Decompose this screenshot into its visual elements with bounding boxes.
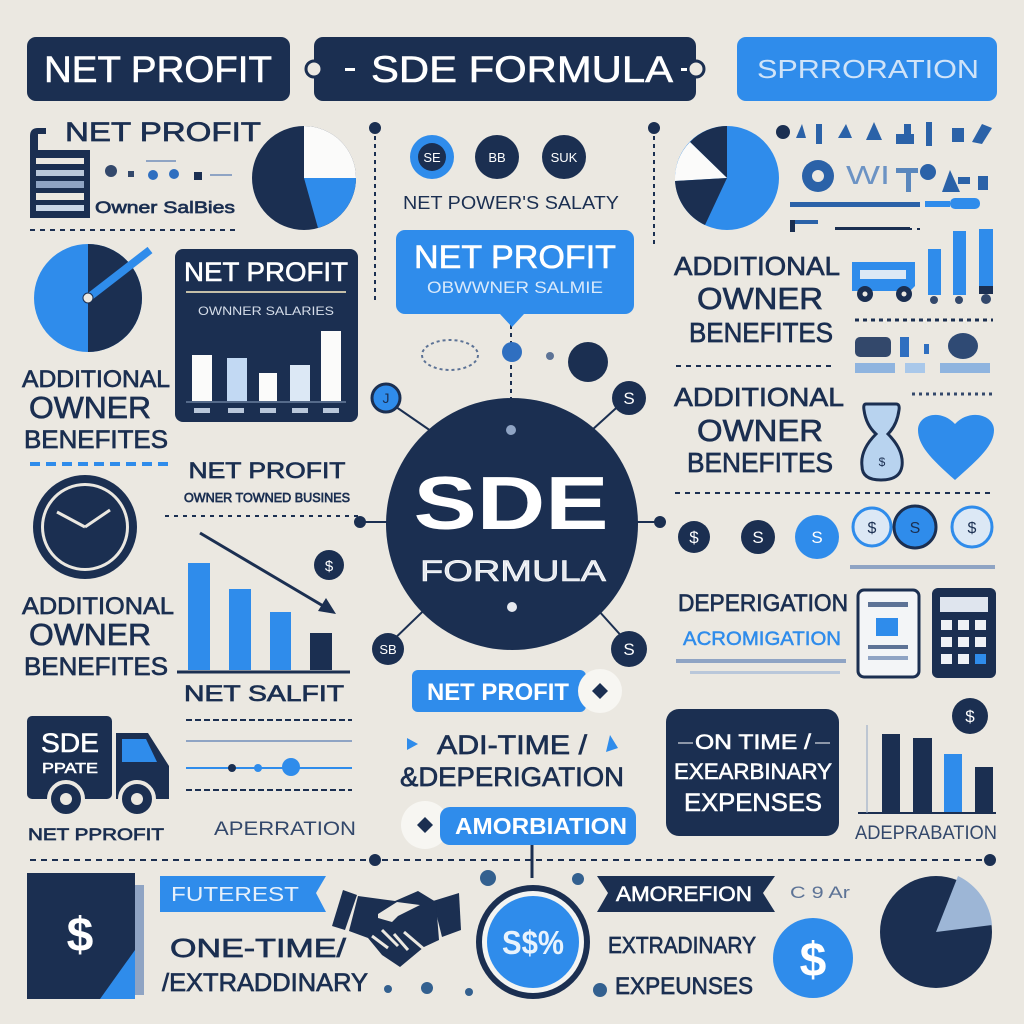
top center round icons: SUK: [551, 150, 578, 165]
header: SDE formula tag: SDE FORMULA: [371, 49, 673, 90]
text: additional owner benefits left lower: BENEFITES: [24, 653, 168, 681]
icon: small truck and bars: [852, 229, 993, 304]
text: additional owner benefits right lower: [674, 382, 844, 478]
text: net power's salary: NET POWER'S SALATY: [403, 193, 619, 213]
text: one-time extraordinary: ONE-TIME/: [170, 933, 347, 963]
satellite badge icons: SB: [379, 642, 397, 657]
coin icons row: $: [968, 520, 977, 537]
panel: one-time extraordinary expenses: [666, 709, 839, 836]
text: net profit under truck: NET PPROFIT: [28, 825, 164, 844]
icon: delivery truck: PPATE: [42, 760, 98, 777]
bar chart: declining blue bars with arrow: $: [325, 558, 334, 575]
icon: handshake: [332, 890, 461, 967]
pie chart: bottom right: [880, 876, 992, 988]
text: adeprabation: ADEPRABATION: [855, 823, 997, 844]
icon: document list: [30, 128, 90, 218]
satellite badge icons: S: [623, 640, 635, 659]
panel: one-time extraordinary expenses: EXEARBINARY: [674, 759, 832, 784]
dashed rule: [675, 492, 995, 494]
header: net profit tag: [27, 37, 290, 101]
blurred info row right: [855, 320, 993, 394]
header: net profit tag: NET PROFIT: [44, 49, 272, 90]
blurred icon rows top right: WI: [846, 160, 890, 190]
text: additional owner benefits right upper: ADDITIONAL: [674, 251, 840, 281]
ribbon: futeresti: [160, 876, 326, 912]
long dashed divider: [30, 845, 995, 878]
text: extradinary expenses: EXTRADINARY: [608, 932, 756, 958]
text: additional owner benefits left upper: ADDITIONAL: [22, 366, 170, 393]
text: extradinary expenses: [608, 932, 756, 1000]
icon: bag hourglass: [862, 404, 902, 480]
callout: net profit: OBWWNER SALMIE: [427, 278, 603, 297]
text: extradinary expenses: EXPEUNSES: [615, 973, 753, 1000]
panel: net profit top-left: [30, 117, 261, 218]
ribbon: futeresti: FUTEREST: [171, 884, 299, 906]
top center round icons: SE: [423, 150, 441, 165]
callout: net profit: NET PROFIT: [414, 239, 616, 275]
text: additional owner benefits left lower: [22, 593, 174, 681]
text: additional owner benefits right lower: BENEFITES: [687, 447, 833, 478]
icon: dollar document: [27, 873, 144, 999]
callout: net profit: [396, 230, 634, 327]
top center round icons: [410, 135, 586, 179]
text: additional owner benefits left upper: BENEFITES: [24, 426, 168, 454]
dollar icons row: S: [752, 528, 764, 547]
text: additional owner benefits left lower: OWNER: [29, 617, 151, 652]
icon: dollar coin: [773, 918, 853, 998]
text: add-time depreciation: ADI-TIME /: [437, 730, 588, 760]
ribbon: amoreation: [597, 876, 775, 912]
ribbon: amoreation: AMOREFION: [616, 883, 752, 906]
icon: tablet document: [858, 590, 919, 677]
text: additional owner benefits left upper: [22, 366, 170, 454]
tag: amorbiation: [401, 801, 636, 849]
bar chart: right lower: [858, 698, 996, 813]
text: aperration: APERRATION: [214, 819, 356, 840]
text: additional owner benefits right lower: OWNER: [697, 413, 823, 448]
icon: calculator: [932, 588, 996, 678]
tag: net profit lower center: NET PROFIT: [427, 679, 569, 706]
text: net profit left middle: [165, 458, 358, 516]
text: deperigation amortigation: [676, 590, 848, 674]
dashed rule: [836, 228, 920, 230]
coin icons row: S: [910, 520, 920, 537]
panel: one-time extraordinary expenses: EXPENSES: [684, 789, 822, 817]
text: add-time depreciation: &DEPERIGATION: [400, 762, 624, 792]
central circle: SDE formula: SDE: [414, 461, 608, 545]
text: additional owner benefits left upper: OWNER: [29, 390, 151, 425]
bar chart: right lower: $: [965, 707, 975, 726]
header: separation tag: SPRRORATION: [757, 54, 979, 84]
panel: net profit bar chart: [175, 249, 358, 422]
small connector icons: [422, 340, 608, 382]
slider lines diagram: [186, 720, 352, 790]
text: net profit left middle: OWNER TOWNED BUSINES: [184, 490, 350, 505]
text: deperigation amortigation: ACROMIGATION: [683, 629, 841, 650]
dollar icons row: S: [811, 528, 823, 547]
dashed rule: [30, 229, 236, 231]
icon: dollar coin: $: [800, 934, 827, 987]
panel: net profit bar chart: OWNNER SALARIES: [198, 304, 334, 318]
satellite badge icons: [372, 381, 647, 667]
text: additional owner benefits right lower: ADDITIONAL: [674, 382, 844, 412]
icon: clock: [33, 475, 137, 579]
header: separation tag: [737, 37, 997, 101]
satellite badge icons: S: [623, 389, 635, 408]
center connector lines: [355, 123, 665, 645]
satellite badge icons: J: [382, 390, 390, 406]
text: one-time extraordinary: /EXTRADDINARY: [162, 969, 368, 997]
icon: heart: [918, 415, 994, 480]
pie chart: top right: [675, 126, 779, 230]
small icons row: [105, 160, 232, 180]
header: SDE formula tag: [306, 37, 704, 101]
panel: net profit bar chart: NET PROFIT: [184, 257, 348, 287]
central circle: SDE formula: FORMULA: [420, 555, 606, 588]
text: additional owner benefits right upper: BENEFITES: [689, 317, 833, 348]
text: one-time extraordinary: [162, 933, 368, 997]
coin icons row: [850, 506, 995, 569]
dollar icons row: $: [689, 528, 699, 547]
small icons top of coin: C 9 Ar: [790, 883, 850, 902]
dollar icons row: [678, 515, 839, 559]
icon: bag hourglass: $: [879, 455, 886, 469]
coin icons row: $: [868, 520, 877, 537]
icon: dollar document: $: [67, 909, 94, 962]
text: owner salaries: Owner SalBies: [95, 198, 235, 217]
text: deperigation amortigation: DEPERIGATION: [678, 590, 848, 617]
top center round icons: BB: [488, 150, 506, 165]
small dots near badge: [384, 870, 607, 997]
pie chart with pointer: [34, 244, 150, 352]
text: additional owner benefits left lower: ADDITIONAL: [22, 593, 174, 620]
badge: percent: S$%: [502, 924, 564, 961]
badge: percent: [476, 885, 590, 999]
icon: delivery truck: SDE: [41, 728, 99, 758]
blurred text rule left: [30, 462, 172, 466]
tag: net profit lower center: [412, 669, 622, 713]
dashed rule: [676, 365, 832, 367]
text: net profit left middle: NET PROFIT: [188, 458, 346, 483]
icon: delivery truck: [27, 716, 169, 816]
blurred icon rows top right: [776, 122, 992, 232]
text: additional owner benefits right upper: OWNER: [697, 281, 823, 316]
central circle: SDE formula: [386, 398, 638, 650]
text: additional owner benefits right upper: [674, 251, 840, 348]
bar chart: declining blue bars with arrow: [177, 533, 350, 672]
heading: net profit: NET PROFIT: [65, 117, 261, 147]
tag: amorbiation: AMORBIATION: [455, 813, 627, 839]
pie chart: top left: [252, 126, 356, 230]
panel: one-time extraordinary expenses: ON TIME /: [695, 731, 811, 754]
text: net salfit: NET SALFIT: [184, 681, 344, 706]
text: add-time depreciation: [400, 730, 624, 792]
